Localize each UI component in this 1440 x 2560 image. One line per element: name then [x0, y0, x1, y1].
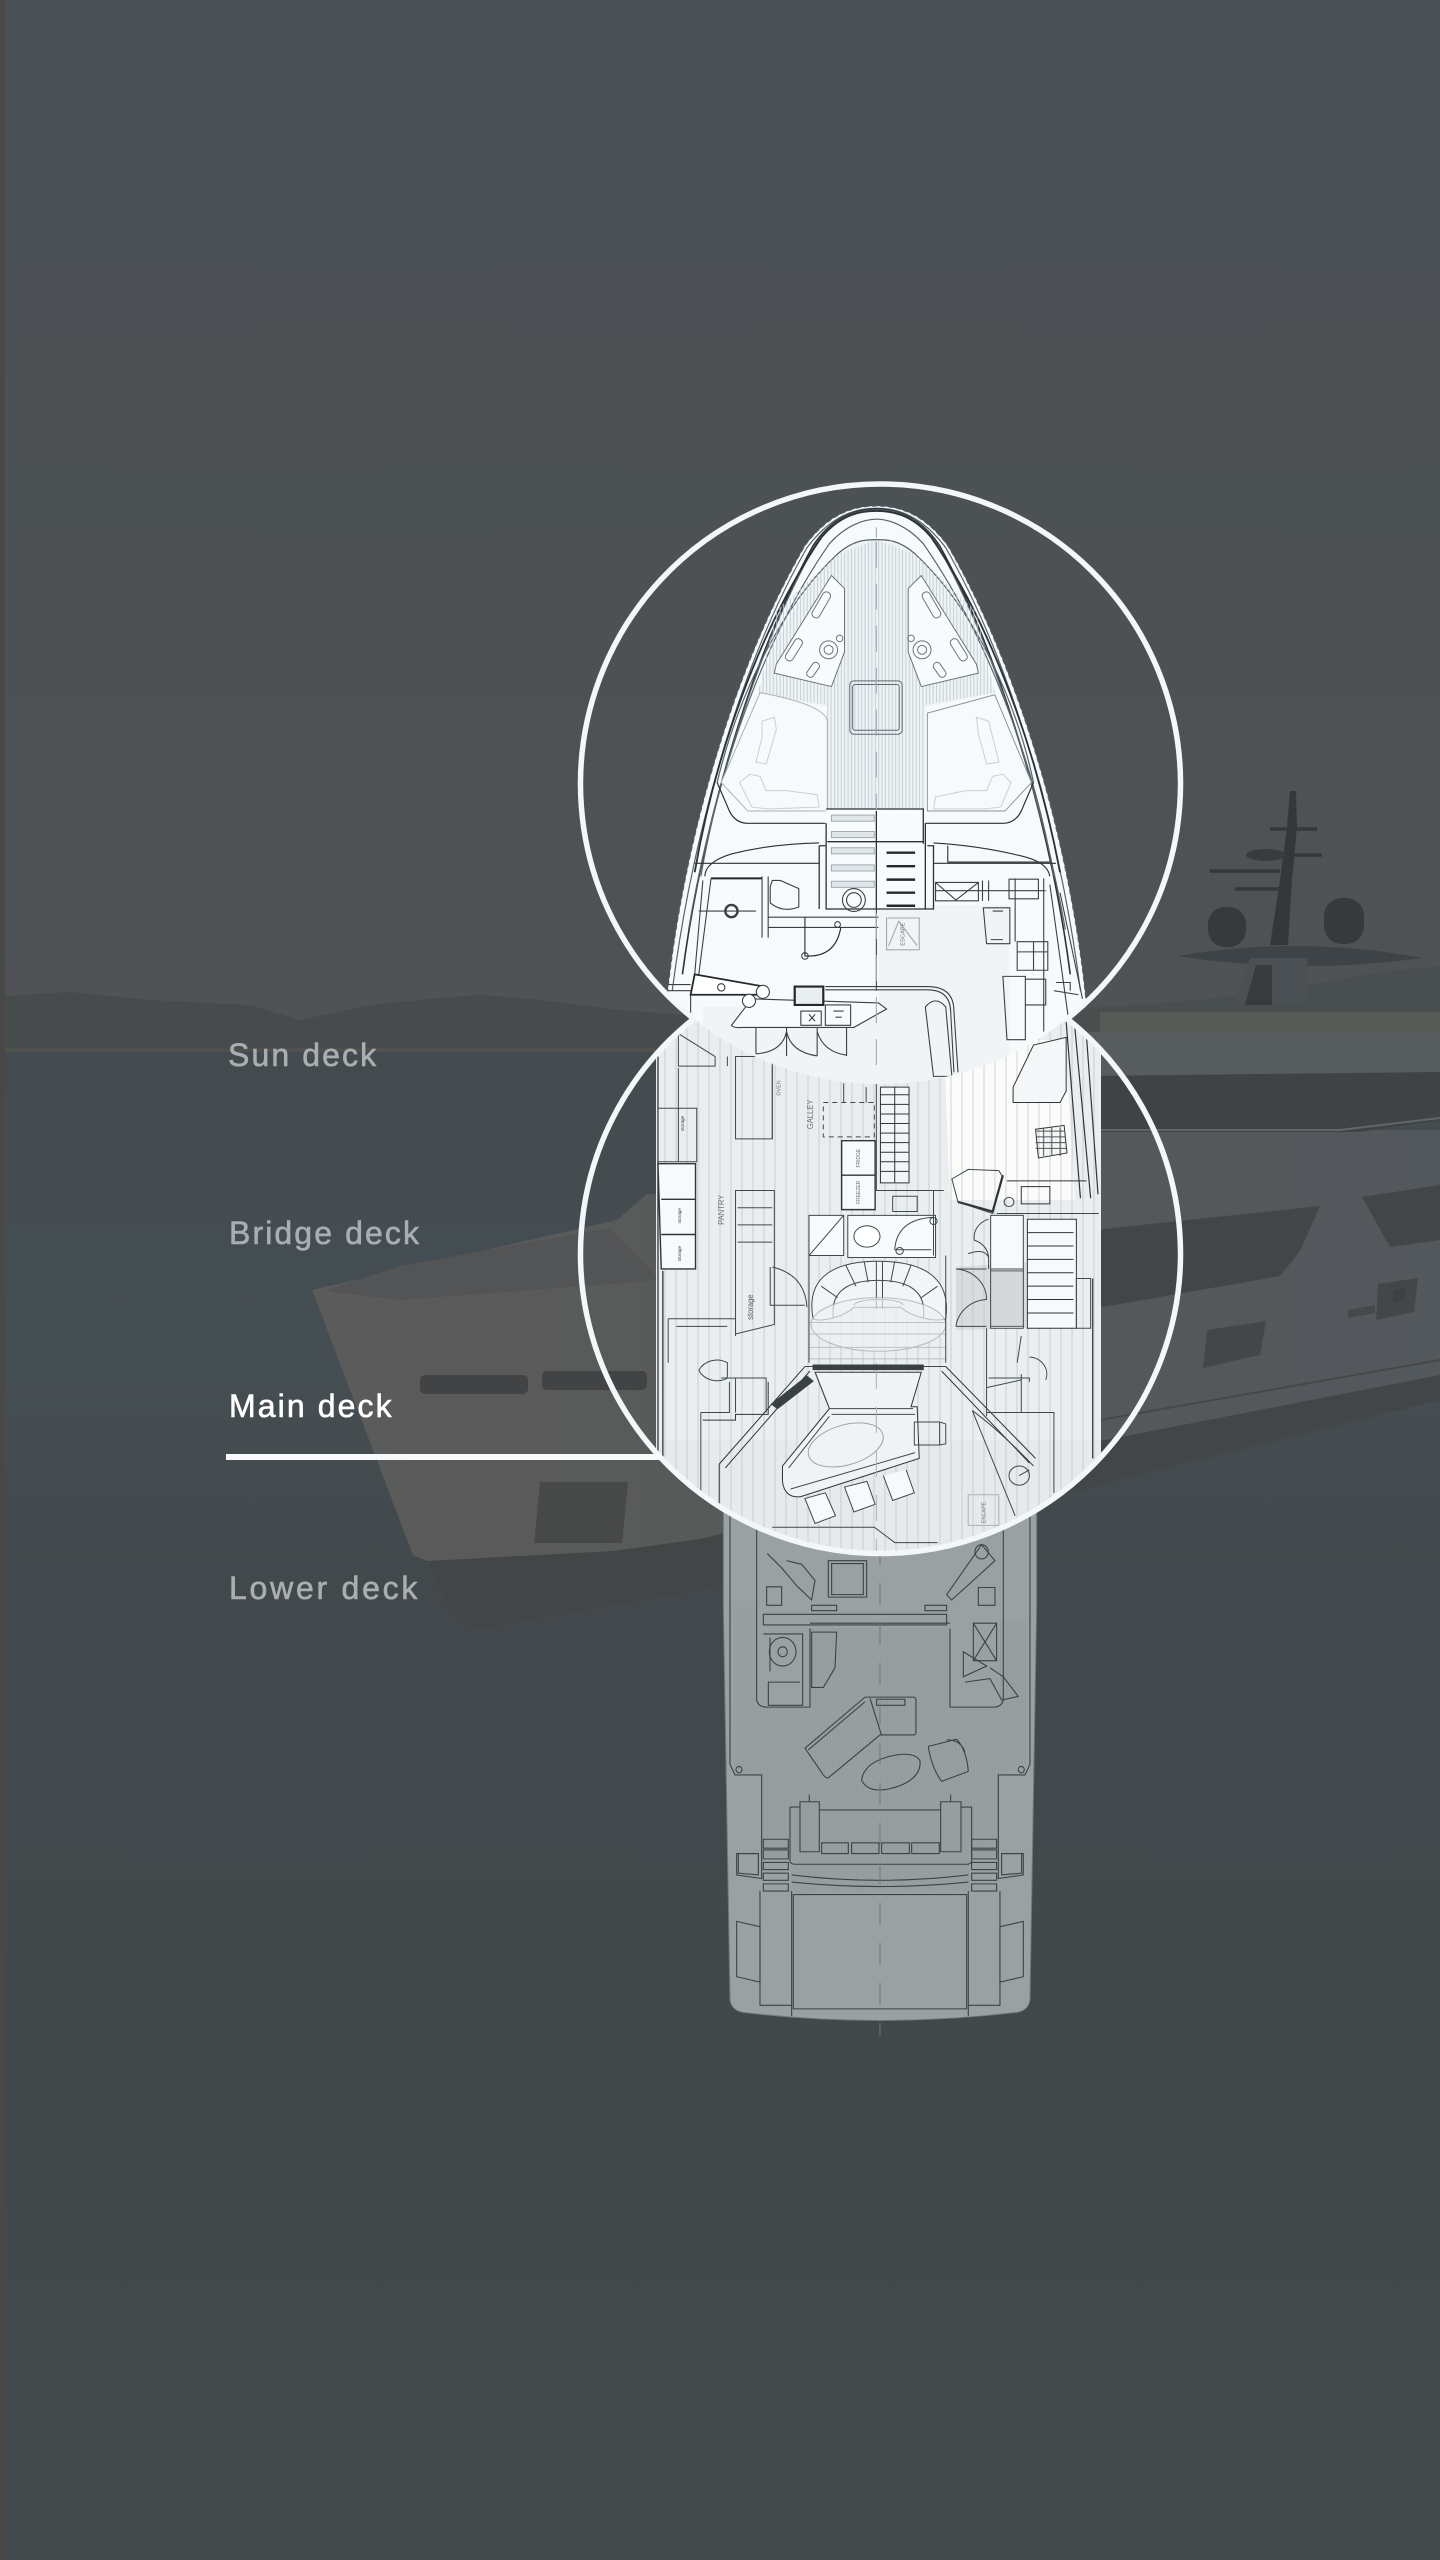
bridge deck plan inside upper circle — [658, 506, 1096, 1113]
starboard sun pad with sofa — [927, 695, 1031, 811]
background photo: lower water — [0, 1600, 1440, 2560]
background photo: sky — [0, 0, 1440, 1060]
fore deck fine stripes — [758, 540, 995, 811]
background photo: sea — [0, 1052, 1440, 1612]
label: lower deck: Lower deck — [229, 1570, 420, 1606]
background photo: distant hills — [5, 966, 1440, 1056]
forward hull lines — [672, 508, 1080, 991]
text: storage lower: storage — [677, 1246, 683, 1261]
infographic canvas — [5, 0, 1440, 2036]
main deck white plate — [656, 1018, 1101, 1551]
port console — [774, 576, 845, 687]
text: fridge: FRIDGE — [856, 1148, 862, 1168]
aft cabin stripes — [709, 1030, 908, 1084]
lower deck centre line — [880, 1556, 881, 2036]
port sun pad with sofa — [721, 693, 827, 811]
text: storage top: storage — [680, 1116, 686, 1131]
text: pantry: PANTRY — [717, 1194, 726, 1225]
lower deck decking stripes — [734, 1608, 1026, 1892]
deck selector line — [226, 1454, 662, 1460]
label: sun deck: Sun deck — [228, 1037, 378, 1073]
starboard console — [908, 576, 978, 687]
fore deck stripes — [758, 540, 995, 811]
text: escape upper: ESCAPE — [901, 922, 907, 946]
aft cabin line work — [668, 527, 1082, 1080]
main deck bright reflection — [945, 1040, 1075, 1200]
hatched bar under stairs — [771, 1365, 923, 1409]
label: main deck: Main deck — [229, 1388, 394, 1424]
background yacht — [312, 791, 1440, 1630]
text: escape: ESCAPE — [981, 1501, 987, 1523]
label: bridge deck: Bridge deck — [229, 1215, 421, 1251]
lower deck hull silhouette — [722, 1512, 1038, 2021]
main deck line work — [658, 1022, 1099, 1554]
lower deck plan in grey — [722, 1512, 1038, 2036]
text: storage middle: storage — [677, 1208, 683, 1223]
figure-eight lens outline — [580, 484, 1180, 1553]
forward hull silhouette — [658, 506, 1096, 1113]
lower deck line work — [730, 1500, 1030, 2016]
main deck plan inside lower circle — [656, 1018, 1101, 1551]
text: storage: storage — [746, 1294, 755, 1320]
text: galley: GALLEY — [806, 1099, 815, 1129]
text: oven: OVEN — [776, 1080, 782, 1096]
left edge strip — [0, 0, 5, 2560]
main deck stripes — [664, 1022, 1094, 1551]
text: freezer: FREEZER — [856, 1180, 862, 1204]
main deck lower tint — [656, 1440, 1101, 1570]
central stairs — [819, 809, 934, 909]
deck hatch — [850, 681, 902, 734]
main deck yacht window showing through — [956, 1262, 1030, 1330]
